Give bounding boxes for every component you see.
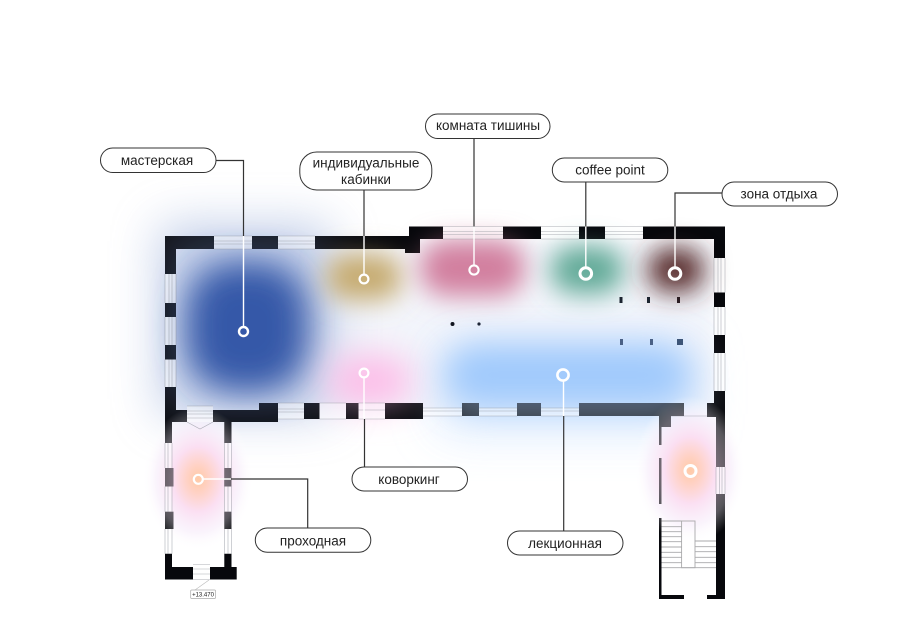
callout: зона отдыха: зона отдыха — [741, 186, 818, 202]
columns — [450, 297, 683, 345]
callout: мастерская — [100, 148, 248, 336]
staircase — [662, 521, 716, 568]
windows — [165, 226, 725, 580]
callout: индивидуальные кабинки — [300, 152, 432, 283]
callout: coffee point — [552, 158, 668, 279]
callout: комната тишины — [426, 114, 550, 275]
callout: комната тишины: комната тишины — [436, 118, 540, 133]
interior base tint — [174, 240, 714, 412]
building walls — [142, 225, 746, 599]
callout: индивидуальные кабинки: индивидуальные — [313, 156, 419, 170]
callout: индивидуальные кабинки: кабинки — [341, 172, 391, 187]
callout: коворкинг: коворкинг — [378, 472, 440, 487]
callout: мастерская: мастерская — [121, 153, 193, 168]
marker: лестничный холл — [685, 466, 696, 476]
callout: зона отдыха — [669, 182, 838, 279]
callout: лекционная: лекционная — [528, 536, 602, 551]
colour zones glow — [142, 225, 746, 551]
callout: проходная: проходная — [280, 534, 346, 548]
callout: лекционная — [508, 369, 623, 555]
callout: проходная — [194, 475, 371, 552]
callout: coffee point: coffee point — [575, 162, 645, 178]
elevation mark — [191, 580, 216, 599]
callout: коворкинг — [352, 369, 468, 491]
elevation mark: +13.470 — [192, 593, 215, 599]
